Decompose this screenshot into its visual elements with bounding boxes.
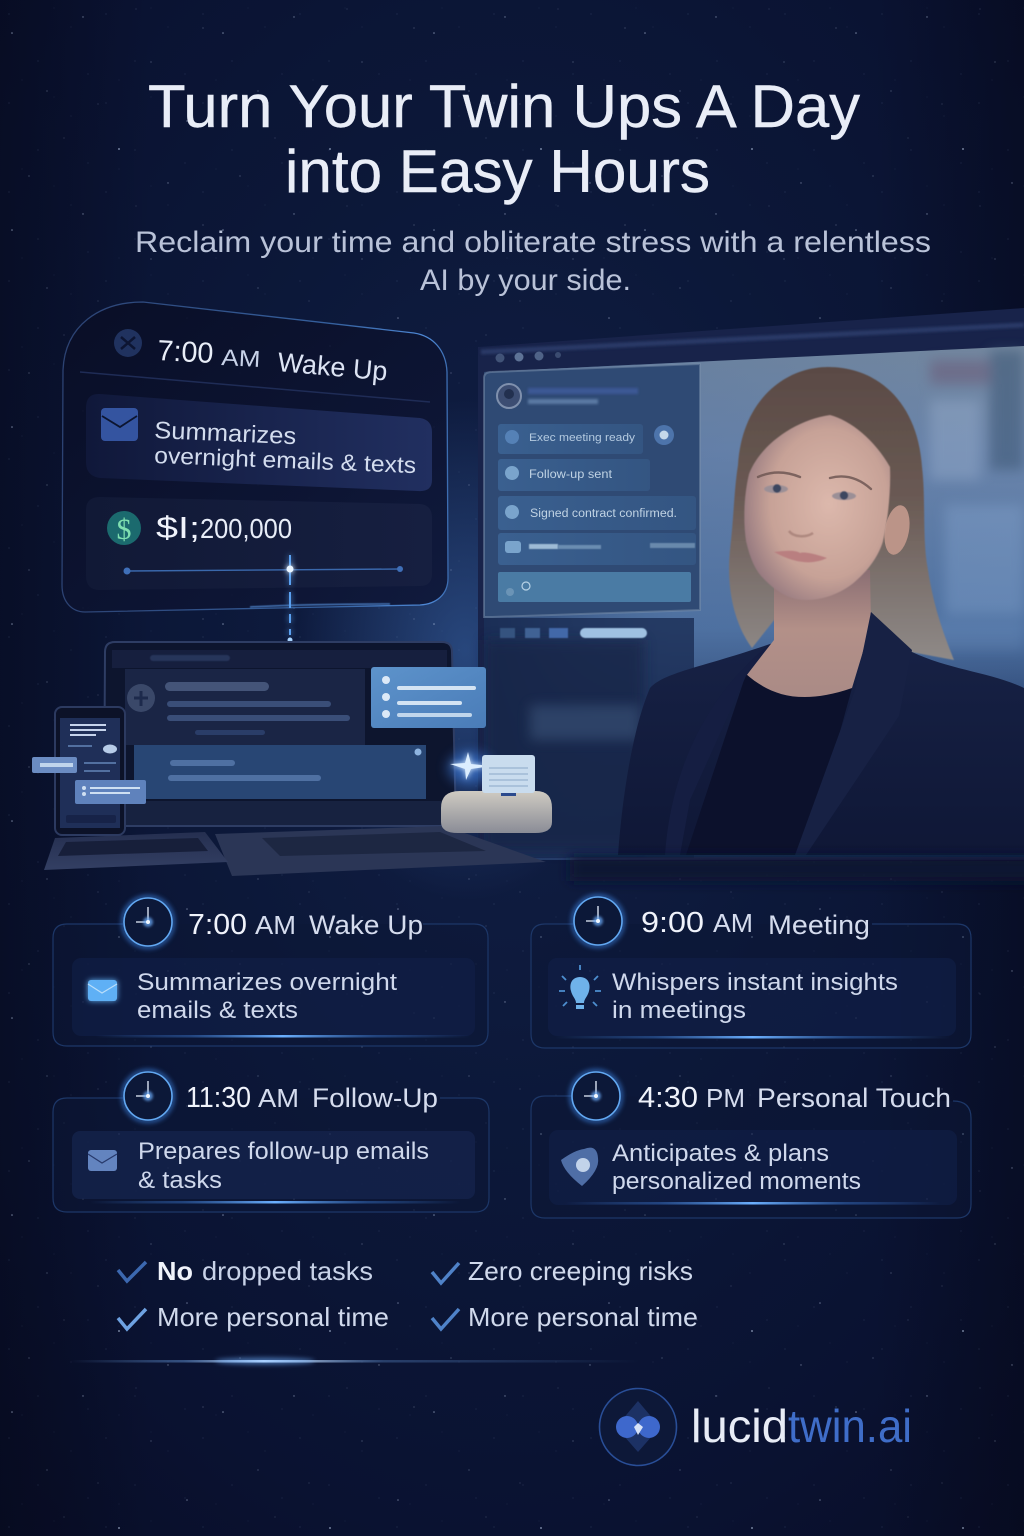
connector with glowing node bbox=[286, 555, 294, 642]
card description: in meetings bbox=[612, 997, 746, 1024]
chat input bbox=[498, 572, 691, 602]
subtitle bbox=[135, 226, 931, 297]
title bbox=[148, 73, 860, 205]
benefit: more personal time right: More personal time bbox=[468, 1302, 698, 1332]
laptop popup bbox=[371, 667, 486, 728]
chat avatar bbox=[497, 384, 521, 408]
card: 7:00 AM Wake Up bbox=[53, 897, 488, 1046]
benefit: zero creeping risks: Zero creeping risks bbox=[468, 1256, 693, 1286]
card heading: 11:30 bbox=[186, 1082, 251, 1114]
card description: Anticipates & plans bbox=[612, 1140, 829, 1167]
panel time and label: 7:00 bbox=[157, 335, 214, 370]
card heading: 9:00 bbox=[641, 907, 704, 939]
icon: envelope bbox=[88, 980, 117, 1001]
card heading: PM bbox=[706, 1083, 745, 1113]
chat row: follow-up: Follow-up sent bbox=[529, 467, 613, 481]
monitor screen bbox=[484, 346, 1024, 860]
card heading: 7:00 bbox=[188, 909, 247, 941]
card description bbox=[612, 1140, 861, 1195]
icon: dollar coin bbox=[107, 511, 141, 546]
card heading: AM bbox=[255, 910, 296, 940]
panel row: email summary bbox=[86, 394, 432, 491]
chat row: signed contract bbox=[498, 496, 696, 530]
card description: Prepares follow-up emails bbox=[138, 1138, 429, 1165]
monitor frame bbox=[478, 308, 1024, 860]
card heading bbox=[641, 907, 870, 940]
blurred city data on the right bbox=[930, 350, 1024, 650]
card: 9:00 AM Meeting bbox=[531, 896, 971, 1048]
chip left bbox=[32, 757, 77, 773]
icon: envelope bbox=[88, 1150, 117, 1171]
card heading: Wake Up bbox=[309, 910, 423, 940]
card description: personalized moments bbox=[612, 1168, 861, 1195]
right eyebrow bbox=[830, 476, 871, 489]
logo bbox=[600, 1388, 912, 1466]
panel: wake-up card bbox=[62, 302, 448, 612]
laptop screen bbox=[104, 642, 456, 826]
panel: background monitor bbox=[478, 308, 1024, 860]
panel row: email summary: overnight emails & texts bbox=[154, 442, 417, 478]
card heading: 4:30 bbox=[638, 1082, 698, 1114]
logo: lucid bbox=[691, 1400, 788, 1452]
panel row: dollar amount bbox=[86, 497, 432, 590]
panel time and label: Wake Up bbox=[276, 347, 389, 387]
card heading: Meeting bbox=[768, 910, 870, 940]
device with document card bbox=[441, 752, 552, 833]
subtitle: Reclaim your time and obliterate stress with a relentless bbox=[135, 226, 931, 259]
card description bbox=[137, 969, 397, 1024]
panel row: email summary: Summarizes bbox=[154, 417, 297, 450]
card description: & tasks bbox=[138, 1167, 222, 1194]
logo: twin.ai bbox=[788, 1400, 912, 1452]
left eyebrow bbox=[758, 472, 800, 477]
chat row: exec meeting: Exec meeting ready bbox=[529, 432, 636, 444]
panel row: dollar amount: $I; bbox=[156, 510, 200, 545]
ear bbox=[881, 503, 913, 557]
card: 4:30 PM Personal Touch bbox=[531, 1071, 971, 1218]
chat row: signed contract: Signed contract confirmed. bbox=[530, 508, 677, 520]
laptop bbox=[44, 642, 546, 876]
blazer bbox=[618, 612, 1024, 855]
card description: Whispers instant insights bbox=[612, 969, 898, 996]
lips bbox=[774, 551, 827, 562]
lower monitor band bbox=[484, 618, 694, 858]
nose bbox=[789, 531, 813, 536]
screen card top bbox=[125, 669, 365, 745]
icon: dollar coin: $ bbox=[116, 513, 132, 546]
card description bbox=[138, 1138, 429, 1194]
black top bbox=[686, 674, 852, 855]
icon: light bulb bbox=[559, 965, 601, 1009]
card description bbox=[612, 969, 898, 1024]
clock icon bbox=[571, 1071, 621, 1121]
clock icon bbox=[573, 896, 623, 946]
card heading: Personal Touch bbox=[757, 1083, 951, 1113]
monitor window dots bbox=[496, 352, 561, 362]
right eye bbox=[832, 491, 856, 500]
title: into Easy Hours bbox=[285, 138, 710, 205]
left lapel bbox=[665, 644, 770, 855]
hair back bbox=[729, 367, 954, 660]
second keyboard bbox=[44, 832, 228, 870]
right lapel bbox=[795, 612, 912, 855]
card heading: Follow-Up bbox=[312, 1083, 438, 1113]
panel: chat window bbox=[484, 364, 700, 617]
logo icon bbox=[600, 1388, 676, 1466]
panel time and label bbox=[157, 335, 389, 387]
title: Turn Your Twin Ups A Day bbox=[148, 73, 860, 140]
screen card bottom bbox=[134, 745, 426, 799]
benefit: more personal time left: More personal time bbox=[157, 1302, 389, 1332]
chat row: exec meeting bbox=[498, 424, 674, 454]
benefit: no dropped tasks: No bbox=[157, 1256, 193, 1286]
panel row: dollar amount: 200,000 bbox=[200, 513, 292, 544]
panel header icon bbox=[114, 329, 142, 357]
icon: envelope bbox=[101, 408, 138, 441]
benefit: no dropped tasks bbox=[118, 1256, 373, 1286]
card heading bbox=[638, 1082, 951, 1114]
chip right bbox=[75, 780, 146, 804]
card heading bbox=[188, 909, 423, 941]
timeline bbox=[124, 566, 403, 574]
chat row: progress bbox=[498, 533, 696, 565]
card: 11:30 AM Follow-Up bbox=[53, 1071, 489, 1212]
icon: heart with clock bbox=[561, 1148, 598, 1186]
glowing divider bbox=[70, 1358, 640, 1364]
person portrait bbox=[618, 367, 1024, 855]
clock icon bbox=[123, 1071, 173, 1121]
neck bbox=[746, 570, 871, 702]
chat row: follow-up bbox=[498, 459, 650, 491]
card description: Summarizes overnight bbox=[137, 969, 397, 996]
phone bbox=[32, 707, 146, 835]
panel time and label: AM bbox=[221, 344, 261, 372]
card heading: AM bbox=[713, 908, 753, 938]
card heading bbox=[186, 1082, 438, 1114]
subtitle: AI by your side. bbox=[420, 264, 631, 297]
face bbox=[744, 415, 890, 600]
left eye bbox=[764, 484, 788, 493]
laptop keyboard bbox=[215, 826, 546, 876]
benefit: no dropped tasks: dropped tasks bbox=[202, 1256, 373, 1286]
clock icon bbox=[123, 897, 173, 947]
card description: emails & texts bbox=[137, 997, 298, 1024]
card heading: AM bbox=[258, 1083, 299, 1113]
desk shadow bbox=[570, 857, 1024, 881]
